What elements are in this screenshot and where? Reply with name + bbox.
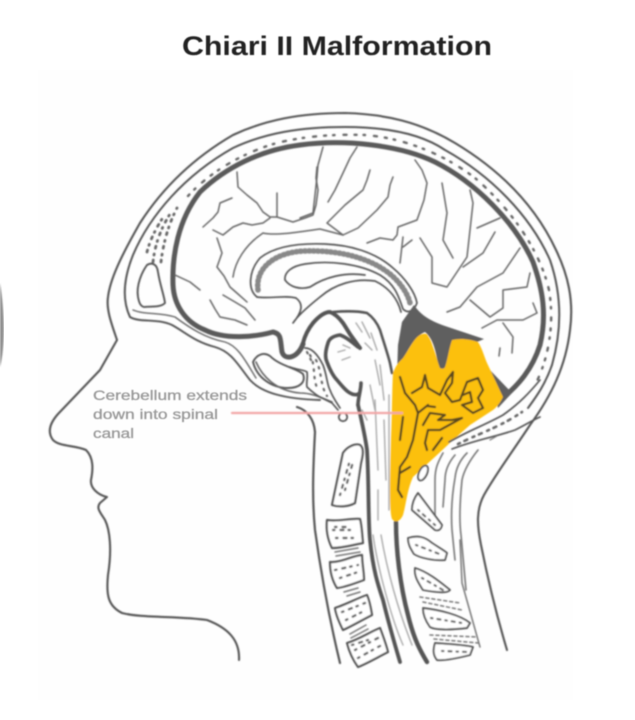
brain sulci	[175, 147, 537, 356]
brainstem fibres	[338, 322, 412, 645]
title: Chiari II Malformation	[182, 31, 492, 61]
intervertebral discs	[335, 548, 368, 638]
callout leader line	[232, 412, 402, 414]
brainstem thick front line	[358, 405, 400, 662]
spinal cord rear thick line	[396, 522, 427, 662]
clivus spongy bone	[290, 348, 347, 421]
midbrain arc, thick	[303, 312, 360, 348]
corpus callosum	[251, 244, 417, 311]
neck muscle lines	[435, 450, 478, 590]
left edge arc	[0, 283, 4, 367]
tentorium dark wedge	[397, 305, 484, 376]
lower skull base line	[130, 317, 320, 400]
callout text: cerebellum	[93, 387, 247, 441]
dura: thick dark brain outline	[173, 143, 544, 396]
frontal sinus	[138, 264, 165, 307]
cerebellum highlighted in yellow	[390, 334, 503, 521]
cervical vertebrae bodies	[327, 444, 388, 667]
skin outline: face and scalp	[50, 113, 571, 660]
spinous processes	[408, 464, 473, 660]
outer skull line	[125, 127, 559, 408]
vertebra texture	[333, 460, 380, 658]
brainstem posterior line	[333, 311, 392, 373]
spinous texture	[416, 510, 468, 652]
skull diploe dots	[188, 135, 551, 385]
head illustration	[50, 113, 571, 667]
callout text: cerebellum: canal	[93, 425, 134, 441]
pons inner thick line	[326, 335, 361, 405]
occipital bone band	[449, 380, 540, 442]
occipital to neck skin fold	[490, 436, 497, 440]
sphenoid sinus	[253, 354, 304, 388]
callout text: cerebellum: Cerebellum extends	[93, 387, 247, 403]
callosum striations	[258, 251, 410, 303]
callout text: cerebellum: down into spinal	[93, 406, 218, 422]
interspinous hatch	[420, 597, 478, 643]
throat line	[297, 407, 340, 663]
